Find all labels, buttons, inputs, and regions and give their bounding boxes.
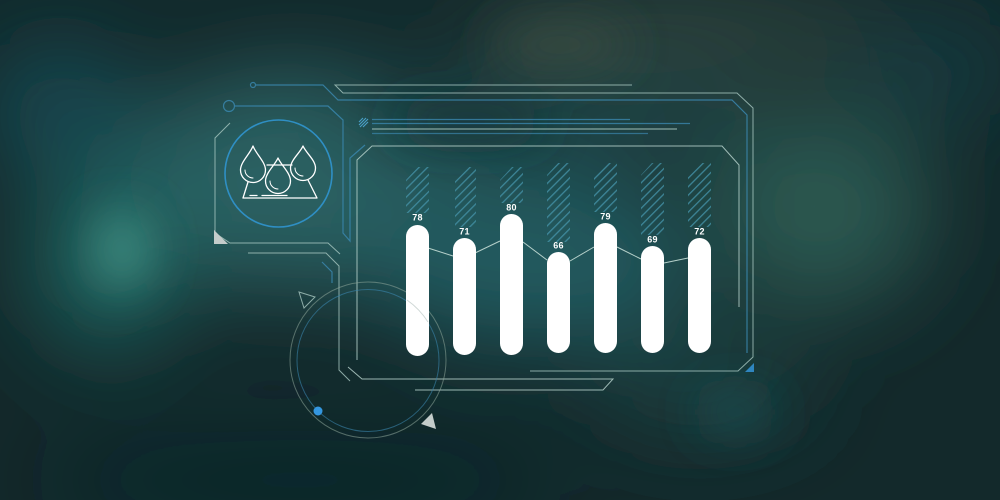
chart panel border — [348, 146, 739, 390]
right drop — [290, 146, 316, 180]
left drop — [240, 146, 266, 182]
dial outline triangle — [299, 292, 315, 308]
icon corner triangle — [214, 230, 228, 244]
header text lines — [372, 120, 690, 134]
bar value labels: 72 — [694, 226, 705, 236]
hatched square marker — [359, 118, 368, 127]
bar value labels — [412, 202, 705, 250]
trend line — [428, 241, 688, 263]
water drops icon — [225, 120, 332, 227]
bar value labels: 79 — [600, 212, 611, 222]
panel corner triangle — [745, 363, 754, 372]
bar value labels: 69 — [647, 234, 658, 244]
dial arc over bar — [407, 300, 428, 322]
icon base — [243, 165, 317, 198]
bar value labels: 80 — [506, 202, 517, 212]
icon ring — [225, 120, 332, 227]
HUD frame: blue lines — [224, 82, 747, 353]
drop highlights — [245, 168, 303, 189]
bar value labels: 71 — [459, 226, 470, 236]
hatched target bars — [406, 163, 711, 242]
dial filled triangle — [421, 413, 436, 429]
dial blue dot — [314, 406, 322, 416]
bar value labels: 66 — [553, 240, 564, 250]
bars — [406, 214, 711, 356]
HUD frame: outer lines — [215, 85, 753, 381]
bar value labels: 78 — [412, 212, 423, 222]
target dial — [290, 282, 446, 438]
middle drop — [266, 158, 290, 194]
